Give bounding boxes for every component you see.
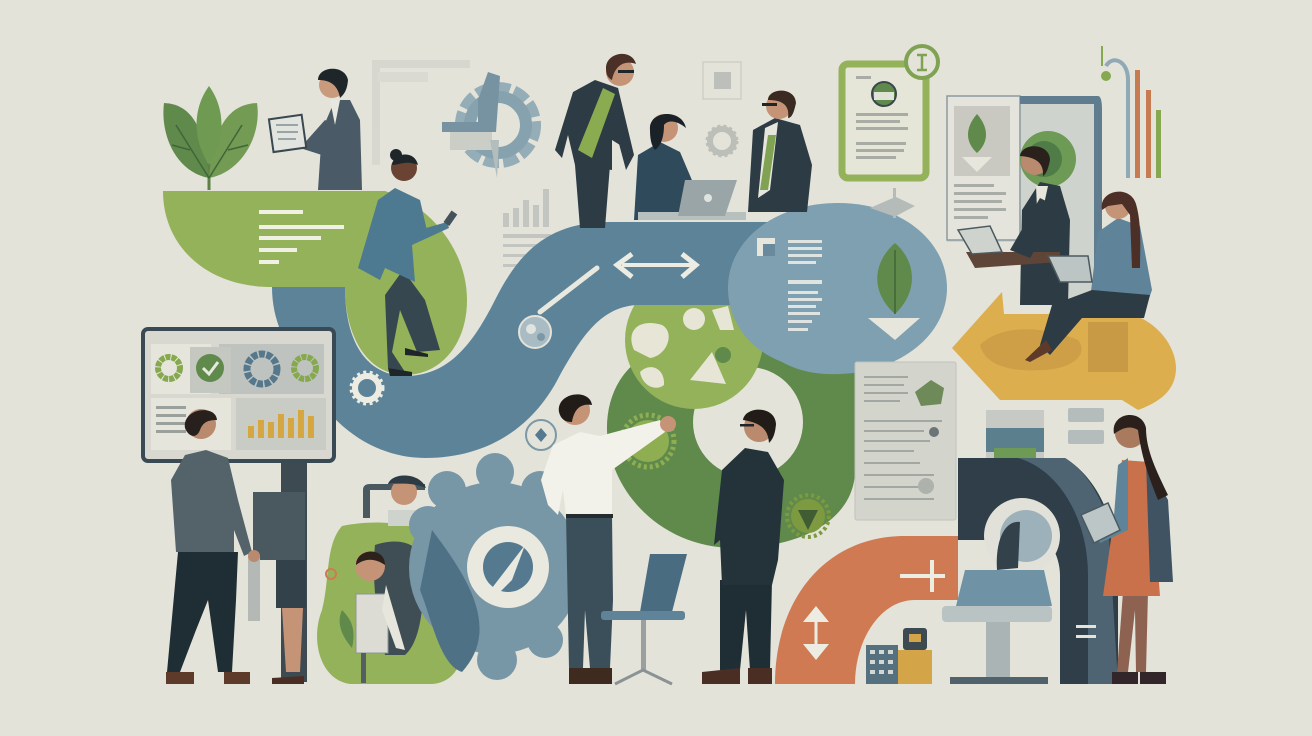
man with tablet by plant <box>269 69 362 190</box>
office chair <box>601 554 687 684</box>
woman in orange dress <box>1081 415 1173 684</box>
small square icon <box>703 62 741 99</box>
grey report card <box>855 362 956 520</box>
man at dashboard <box>166 409 260 684</box>
large blue gear <box>409 453 581 680</box>
standing man green tie <box>555 54 636 228</box>
helmet figure with frame <box>363 475 426 526</box>
green leaf plant <box>163 86 258 190</box>
dark machine arch <box>958 408 1118 684</box>
green swirl shape <box>607 345 855 548</box>
woman with tablet on green shape <box>358 149 457 376</box>
man with laptop on panel <box>958 146 1070 305</box>
woman with laptop on yellow <box>1025 192 1152 362</box>
kiosk post <box>248 492 306 684</box>
small building and jar <box>866 628 932 684</box>
yellow arrow platform <box>952 292 1176 410</box>
small compass arrows <box>870 188 915 218</box>
small round gear badge <box>526 420 556 450</box>
double arrow <box>617 254 696 277</box>
patterned green circle <box>625 271 763 409</box>
blue winding path <box>272 222 770 458</box>
man in dark suit <box>702 410 784 684</box>
blue speech circle with leaf <box>728 203 947 374</box>
man in white shirt pointing <box>541 394 676 684</box>
teal seat <box>942 570 1052 684</box>
gear outline on path <box>351 372 383 404</box>
orange curved arrow band <box>775 536 958 684</box>
faded gear and machine sketch <box>372 60 533 178</box>
grey document panel with leaf <box>947 96 1102 305</box>
dashboard monitor <box>143 329 334 682</box>
small knot icon near green panel <box>326 569 336 579</box>
green bowl platform <box>163 191 467 375</box>
green badge gear <box>787 495 829 537</box>
seated woman at laptop <box>634 114 746 220</box>
standing man right of laptop <box>748 91 812 212</box>
green document card with badge <box>842 46 938 178</box>
green gear on wall <box>622 415 674 467</box>
small grey gear <box>707 126 737 156</box>
faded bar chart <box>503 189 551 267</box>
street lamp and bars <box>1101 46 1161 178</box>
glass node on path <box>519 316 551 348</box>
green person panel <box>317 523 463 684</box>
